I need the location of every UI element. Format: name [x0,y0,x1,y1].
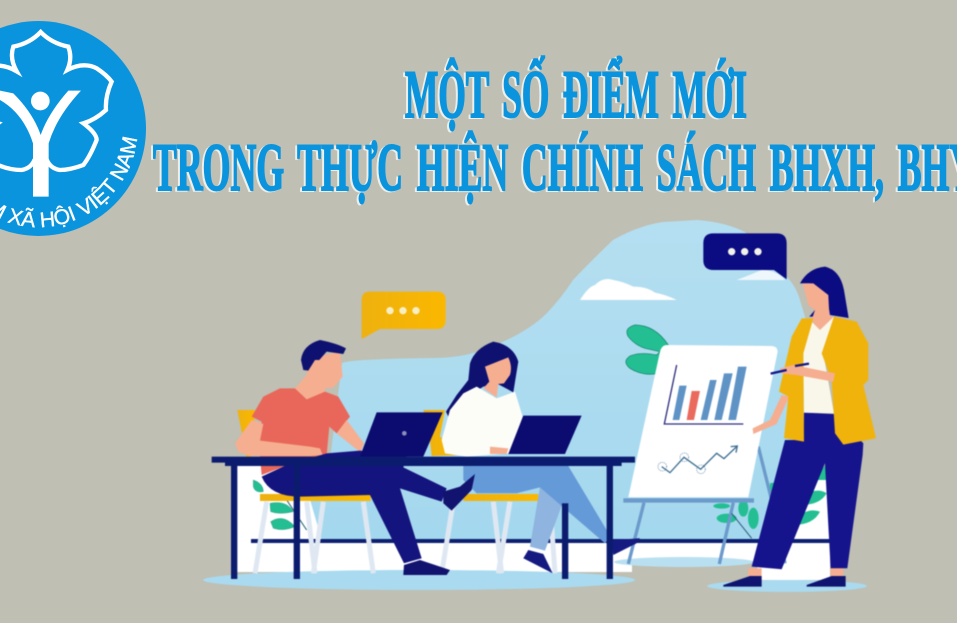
hair [446,342,518,417]
right-hand scene [580,233,876,587]
white floor right [755,480,830,580]
man's hair [301,340,346,371]
near leg [463,466,611,543]
plant behind board [626,325,668,374]
plant under table [253,480,307,530]
standing shoe [403,560,450,575]
left-hand scene [212,292,640,579]
man at laptop [235,340,475,575]
bar chart [664,365,747,424]
shoes [523,550,553,573]
presenter jacket [779,318,813,442]
chair legs [255,502,555,573]
speech bubble navy [703,233,787,279]
presentation board [628,345,778,497]
board ledge [623,498,754,503]
trousers [262,451,447,563]
cloud right [737,270,785,280]
t-shirt [252,388,350,475]
presenter ankles [748,567,843,577]
presenter shoes [723,576,846,587]
presenter top [803,317,834,413]
presenter skin [803,283,835,332]
presenter forearm [780,365,835,382]
logo flower outline [0,32,112,170]
presenter woman [723,267,876,587]
ground ellipse right [707,580,867,592]
logo person figure [0,91,81,197]
illustration: team meeting [203,220,876,592]
presenter lower arm [753,395,789,434]
pen [771,364,809,374]
plant right of board [713,465,827,529]
face [483,357,511,397]
title [153,56,957,205]
hand [490,447,508,454]
blouse [442,387,523,457]
presenter hair back [800,267,849,318]
cloud left [580,279,677,300]
woman at laptop [442,342,640,573]
laptop [360,412,443,457]
man's neck and face [295,352,343,399]
chair backs and seats [237,410,538,501]
white floor middle [630,541,765,561]
line chart with arrow [658,446,737,474]
floor line [251,539,830,543]
white floor left [236,465,632,572]
arms [235,420,323,456]
board easel legs [628,447,785,564]
backdrop blob [300,220,806,540]
logo: Bảo hiểm xã hội Việt Nam [0,21,146,236]
speech bubble amber [362,292,446,339]
ground ellipse left [203,570,635,590]
far leg [530,487,563,551]
table [212,457,635,579]
laptop [508,416,582,454]
presenter trousers [752,413,863,569]
floor shadow middle [614,557,754,567]
raised shoe [443,474,475,511]
